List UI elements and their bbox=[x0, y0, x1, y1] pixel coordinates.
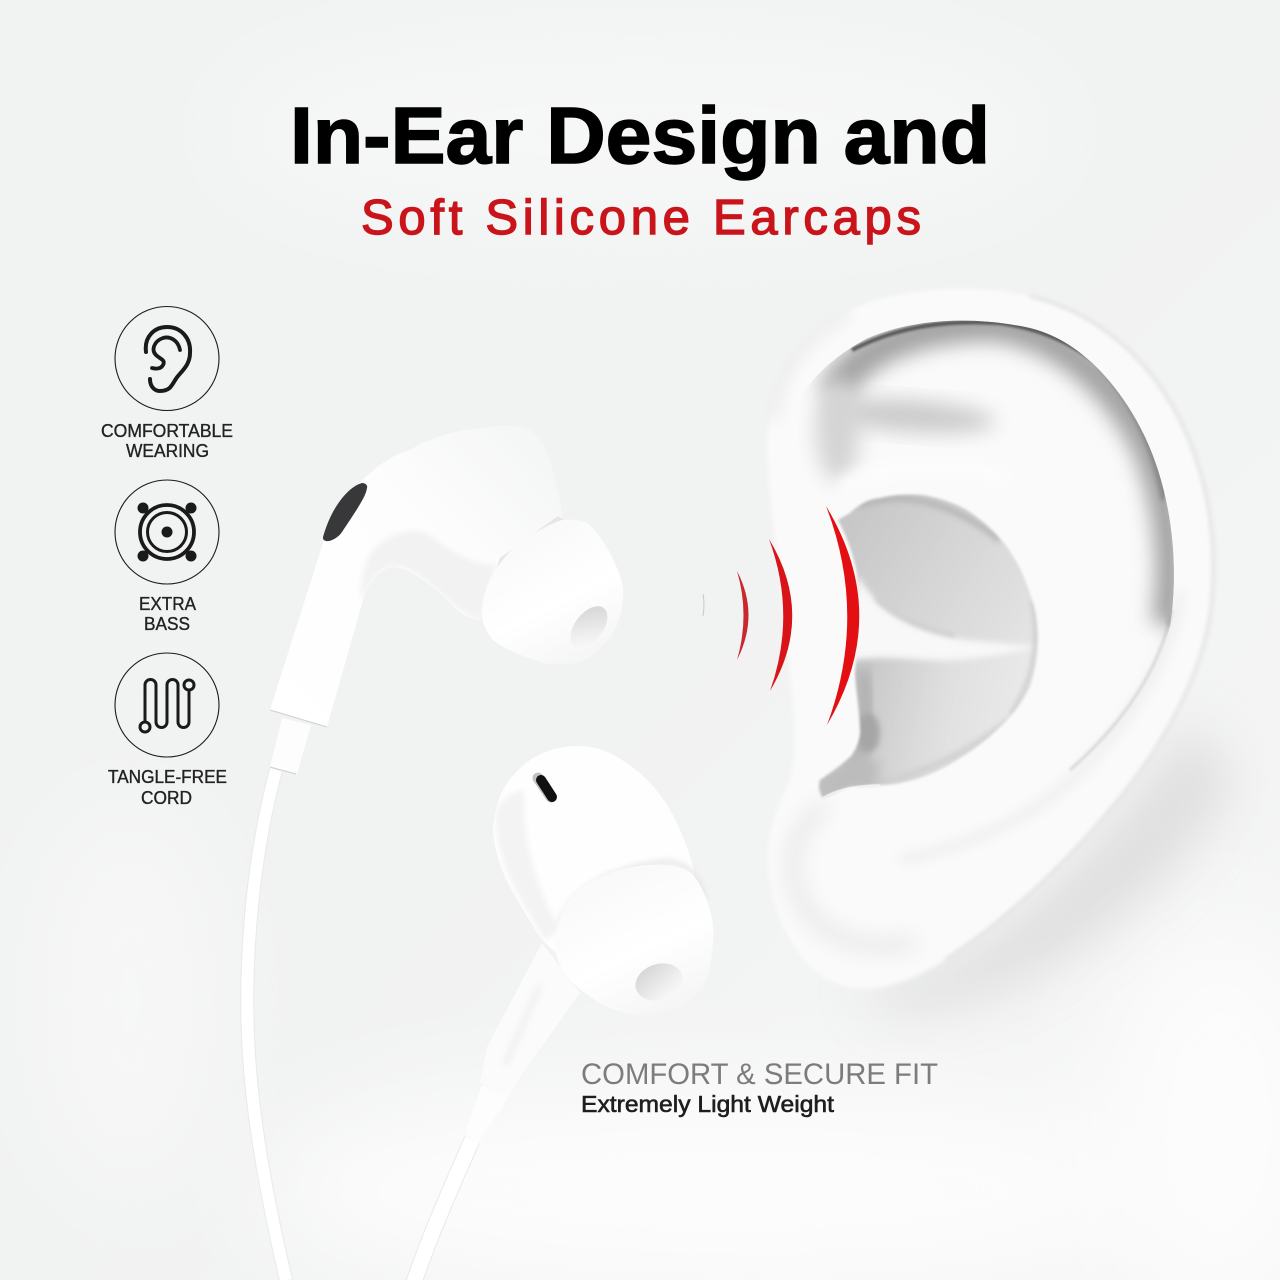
label: extra bass: BASS bbox=[144, 614, 190, 634]
feature list bbox=[101, 306, 233, 808]
ear illustration bbox=[767, 289, 1235, 1011]
ear tip hole bbox=[631, 957, 687, 1007]
ear tip neck bbox=[482, 516, 564, 610]
ear outline bbox=[767, 289, 1213, 989]
icon: cord bbox=[115, 653, 219, 757]
strain relief bbox=[270, 718, 311, 774]
callout: comfort and secure fit bbox=[581, 1058, 938, 1117]
upper earbud bbox=[247, 426, 623, 1280]
bowl shading bbox=[816, 322, 1174, 625]
wave small bbox=[737, 571, 748, 660]
faint wave tick bbox=[703, 594, 704, 616]
callout subtext: Extremely Light Weight bbox=[581, 1091, 835, 1117]
ear tip shadow bbox=[560, 862, 705, 925]
cord bbox=[247, 770, 286, 1280]
subtitle: Soft Silicone Earcaps: Soft Silicone Earcaps bbox=[361, 191, 921, 245]
title bbox=[290, 91, 990, 245]
feature: comfortable wearing bbox=[101, 306, 233, 461]
label: comfortable wearing bbox=[101, 421, 233, 461]
label: comfortable wearing: WEARING bbox=[126, 441, 209, 461]
ear tip hole bbox=[563, 599, 615, 655]
ear canal bbox=[856, 713, 880, 753]
mic slot bbox=[323, 483, 367, 541]
stem bbox=[480, 943, 580, 1098]
ear tip bbox=[555, 865, 713, 1015]
lower earbud bbox=[413, 746, 713, 1280]
lower hollow bbox=[820, 661, 896, 796]
upper hollow bbox=[838, 494, 1037, 648]
antihelix fold bbox=[856, 577, 1029, 662]
lobe crease bbox=[823, 785, 880, 798]
ear tip bbox=[482, 520, 623, 664]
wave medium bbox=[769, 539, 792, 691]
feature: tangle-free cord bbox=[108, 653, 227, 808]
mic grille bbox=[538, 778, 551, 797]
callout heading: COMFORT & SECURE FIT bbox=[581, 1058, 938, 1091]
label: comfortable wearing: COMFORTABLE bbox=[101, 421, 233, 441]
housing bbox=[270, 426, 562, 727]
housing shading bbox=[361, 531, 496, 620]
concha hollow bbox=[818, 493, 1039, 798]
label: tangle-free cord: CORD bbox=[141, 788, 192, 808]
sound waves bbox=[703, 506, 859, 725]
feature: extra bass bbox=[115, 480, 219, 634]
wave large bbox=[826, 506, 859, 725]
label: tangle-free cord: TANGLE-FREE bbox=[108, 767, 227, 787]
icon: ear bbox=[115, 306, 219, 410]
label: extra bass bbox=[139, 594, 196, 634]
label: tangle-free cord bbox=[108, 767, 227, 808]
icon: speaker bbox=[115, 480, 219, 584]
housing side shade bbox=[496, 790, 560, 940]
title line: In-Ear Design and: In-Ear Design and bbox=[290, 91, 990, 180]
label: extra bass: EXTRA bbox=[139, 594, 196, 614]
rim shading bbox=[775, 296, 1213, 960]
strain relief bbox=[465, 1085, 508, 1143]
cord bbox=[413, 1140, 472, 1280]
ear drop shadow bbox=[860, 720, 1235, 1011]
housing bbox=[493, 746, 695, 960]
